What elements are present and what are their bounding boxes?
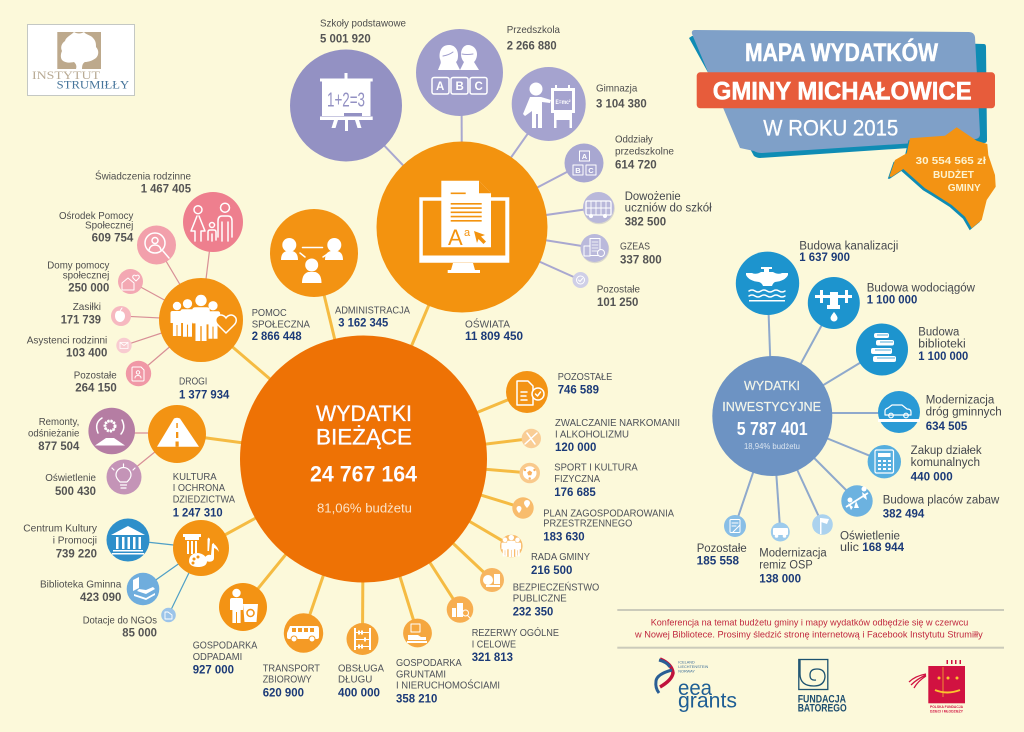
map of the gmina: 30 554 565 zł <box>916 155 986 167</box>
bubble: Drogi <box>148 376 230 463</box>
label: Remonty, odśnieżanie: Remonty, <box>39 416 79 428</box>
icon: map pins <box>516 500 530 513</box>
label: Oświetlenie ulic: Oświetlenie <box>840 530 900 542</box>
label: Remonty, odśnieżanie: 877 504 <box>38 441 80 453</box>
label: GZEAS: 337 800 <box>620 254 662 266</box>
label: Zasiłki <box>61 301 101 326</box>
icon: group of people with heart <box>170 295 236 341</box>
label: Pozostałe: Pozostałe <box>697 543 747 555</box>
bubble: Dowożenie uczniów do szkół <box>583 191 712 229</box>
bubble: Ośrodek Pomocy Społecznej <box>59 210 176 264</box>
bubble: Gospodarka gruntami i nieruchomościami <box>396 619 500 705</box>
main circle: Wydatki inwestycyjne <box>712 356 832 476</box>
main circle: Wydatki bieżące: WYDATKI <box>316 401 412 426</box>
conference notice <box>617 609 1004 649</box>
label: Modernizacja remiz OSP: remiz OSP <box>759 559 813 571</box>
map of the gmina <box>888 127 996 230</box>
label: Budowa wodociągów <box>867 283 976 306</box>
label: Gospodarka gruntami i nieruchomościami <box>396 657 500 705</box>
label: Domy pomocy społecznej: 250 000 <box>68 283 109 295</box>
icon: document and pen <box>730 520 740 532</box>
label: Biblioteka Gminna <box>40 578 121 604</box>
icon: envelope <box>120 342 128 348</box>
label: Rada gminy: RADA GMINY <box>531 551 590 563</box>
label: Sport i kultura fizyczna <box>554 462 638 499</box>
label: Pozostałe <box>74 369 117 395</box>
label: Obsługa długu: 400 000 <box>338 688 380 700</box>
label: Asystenci rodzinni: Asystenci rodzinni <box>27 334 107 346</box>
label: Zwalczanie narkomanii i alkoholizmu: 120 000 <box>555 442 596 454</box>
label: Oddziały przedszkolne: 614 720 <box>615 159 657 171</box>
label: Bezpieczeństwo publiczne: PUBLICZNE <box>513 593 567 605</box>
label: Rezerwy ogólne i celowe: I CELOWE <box>472 638 516 650</box>
icon: football <box>523 466 536 480</box>
bubble: Pozostałe pomoc społeczna <box>74 361 151 395</box>
label: Remonty, odśnieżanie <box>28 416 80 453</box>
label: Asystenci rodzinni: 103 400 <box>66 348 107 360</box>
label: Domy pomocy społecznej: społecznej <box>63 269 109 281</box>
icon: monitor with document <box>419 181 509 273</box>
icon: children and ABC blocks: C <box>474 81 483 93</box>
icon: buildings with magnifier <box>452 603 470 618</box>
bubble: Oświetlenie ulic <box>812 514 905 554</box>
label: Remonty, odśnieżanie: odśnieżanie <box>28 428 79 440</box>
label: Plan zagospodarowania przestrzennego: PRZESTRZENNEGO <box>543 518 632 530</box>
label: Rada gminy <box>531 551 590 577</box>
label: Kultura i ochrona dziedzictwa: 1 247 310 <box>173 508 223 520</box>
label: Plan zagospodarowania przestrzennego: PLAN ZAGOSPODAROWANIA <box>543 508 674 520</box>
logo: Fundacja Batorego: BATOREGO <box>798 703 847 715</box>
icon: stack of books <box>871 333 896 362</box>
logo: Polska Fundacja Dzieci i Młodzieży <box>909 660 965 713</box>
label: Kultura i ochrona dziedzictwa: KULTURA <box>173 471 217 483</box>
label: Modernizacja dróg gminnych: 634 505 <box>926 421 968 433</box>
label: Rezerwy ogólne i celowe: 321 813 <box>472 652 513 664</box>
icon: fire truck <box>773 528 788 538</box>
label: Kultura i ochrona dziedzictwa <box>173 471 235 520</box>
icon: tap above water <box>746 267 788 302</box>
label: Modernizacja remiz OSP <box>759 548 827 586</box>
icon: land and document <box>407 624 427 643</box>
bubble: Bezpieczeństwo publiczne <box>480 568 599 619</box>
label: Bezpieczeństwo publiczne <box>513 581 599 619</box>
icon: people <box>501 535 521 557</box>
label: Zwalczanie narkomanii i alkoholizmu: I ALKOHOLIZMU <box>555 428 629 440</box>
label: Bezpieczeństwo publiczne: 232 350 <box>513 607 553 619</box>
map of the gmina: BUDŻET <box>933 168 975 181</box>
bubble: Biblioteka Gminna <box>40 573 159 605</box>
icon: check badge <box>576 276 584 284</box>
bubble: Transport zbiorowy <box>263 613 323 700</box>
label: Budowa wodociągów: 1 100 000 <box>867 294 917 306</box>
bubble: Rada gminy <box>500 535 590 577</box>
icon: apple <box>115 308 125 322</box>
bubble: Budowa biblioteki <box>856 324 968 376</box>
label: Przedszkola <box>507 24 560 52</box>
bubble: Modernizacja dróg gminnych <box>878 391 1002 433</box>
label: Transport zbiorowy <box>263 662 321 700</box>
logo: EEA Grants: eea <box>678 677 712 700</box>
label: Pozostałe <box>558 371 612 397</box>
label: Zwalczanie narkomanii i alkoholizmu <box>555 417 680 454</box>
label: Ośrodek Pomocy Społecznej <box>59 210 134 245</box>
icon: gear above road <box>95 418 125 446</box>
label: Oświata <box>465 317 523 343</box>
label: Świadczenia rodzinne: 1 467 405 <box>141 184 192 196</box>
icon: shield <box>483 574 500 587</box>
label: Transport zbiorowy: TRANSPORT <box>263 662 321 674</box>
label: Dotacje do NGOs <box>83 614 157 640</box>
bubble: Obsługa długu <box>338 623 384 700</box>
bubble: Pozostałe inwestycyjne <box>697 515 747 567</box>
label: Szkoły podstawowe <box>320 18 406 46</box>
bubble: Sport i kultura fizyczna <box>519 462 638 499</box>
label: Ośrodek Pomocy Społecznej: Społecznej <box>85 219 133 231</box>
bubble: Pozostałe oświata <box>572 272 640 309</box>
label: Pozostałe <box>597 283 640 309</box>
icon: calculator <box>875 450 894 473</box>
title banner: MAPA WYDATKÓW <box>745 37 938 67</box>
bubble: Administracja <box>270 209 410 330</box>
logo: Fundacja Batorego <box>798 660 847 715</box>
bubble: Rezerwy ogólne i celowe <box>447 596 559 664</box>
label: Gospodarka gruntami i nieruchomościami: GOSPODARKA <box>396 657 462 669</box>
label: Zwalczanie narkomanii i alkoholizmu: ZWALCZANIE NARKOMANII <box>555 417 680 429</box>
label: Gimnazja <box>596 83 647 110</box>
bubble: Pomoc społeczna <box>159 278 310 362</box>
label: Świadczenia rodzinne: Świadczenia rodzinne <box>95 169 191 182</box>
label: Oświetlenie: Oświetlenie <box>45 472 96 484</box>
label: Drogi: 1 377 934 <box>179 389 230 401</box>
logo: Instytut Strumiłły: INSTYTUT <box>32 70 100 82</box>
icon: bus <box>287 626 319 642</box>
label: Dowożenie uczniów do szkół: uczniów do szkół <box>625 203 712 215</box>
label: Biblioteka Gminna: 423 090 <box>80 592 121 604</box>
icon: ABC cubes: A <box>582 152 588 161</box>
label: Pozostałe: 746 589 <box>558 385 599 397</box>
label: Gospodarka gruntami i nieruchomościami: I NIERUCHOMOŚCIAMI <box>396 678 500 691</box>
label: Gospodarka gruntami i nieruchomościami: 358 210 <box>396 693 437 705</box>
label: Sport i kultura fizyczna: SPORT I KULTURA <box>554 462 638 474</box>
label: Centrum Kultury i Promocji: Centrum Kultury <box>23 523 98 535</box>
label: Pozostałe: Pozostałe <box>597 283 640 295</box>
label: Oświetlenie ulic: 168 944 <box>862 542 905 554</box>
label: Gospodarka odpadami <box>193 639 257 677</box>
bubble: Świadczenia rodzinne <box>95 169 243 252</box>
label: Kultura i ochrona dziedzictwa: I OCHRONA <box>173 482 225 494</box>
icon: crossed syringe <box>525 433 537 444</box>
label: Pomoc społeczna: POMOC <box>252 307 287 319</box>
conference notice: Konferencja na temat budżetu gminy i mapy wydatków odbędzie się w czerwcu <box>651 617 968 628</box>
label: Modernizacja remiz OSP: Modernizacja <box>759 548 827 560</box>
icon: children and ABC blocks: A <box>436 81 444 93</box>
label: Oddziały przedszkolne: Oddziały <box>615 134 653 146</box>
map of the gmina: GMINY <box>948 182 981 194</box>
label: Dotacje do NGOs: 85 000 <box>122 628 157 640</box>
icon: presentation board: 1+2=3 <box>327 90 365 112</box>
label: Administracja <box>335 304 410 330</box>
label: Kultura i ochrona dziedzictwa: DZIEDZICTWA <box>173 493 235 505</box>
bubble: Oświetlenie <box>45 460 141 498</box>
icon: abacus <box>354 628 371 650</box>
label: Oddziały przedszkolne: przedszkolne <box>615 146 674 158</box>
bubble: Remonty, odśnieżanie <box>28 408 135 454</box>
bubble: Przedszkola <box>416 24 560 116</box>
logo: Polska Fundacja Dzieci i Młodzieży: POLSKA FUNDACJA <box>930 705 963 709</box>
label: Pomoc społeczna: SPOŁECZNA <box>252 318 310 330</box>
icon: light bulb <box>112 464 135 488</box>
icon: museum building <box>111 526 145 554</box>
main circle: Wydatki bieżące: BIEŻĄCE <box>316 424 412 450</box>
label: Gospodarka gruntami i nieruchomościami: GRUNTAMI <box>396 668 446 680</box>
bubble: Zasiłki <box>61 301 131 326</box>
icon: family <box>191 203 232 241</box>
bubble: Budowa placów zabaw <box>841 485 1000 521</box>
label: Transport zbiorowy: ZBIOROWY <box>263 674 312 686</box>
bubble: Domy pomocy społecznej <box>47 259 143 295</box>
label: Budowa placów zabaw: Budowa placów zabaw <box>883 494 1000 506</box>
icon: small document <box>165 612 172 619</box>
label: Budowa placów zabaw <box>883 494 1000 521</box>
label: Centrum Kultury i Promocji <box>23 523 98 560</box>
bubble: Oddziały przedszkolne <box>564 134 674 182</box>
label: Pomoc społeczna: 2 866 448 <box>252 331 302 343</box>
label: Rezerwy ogólne i celowe: REZERWY OGÓLNE <box>472 626 559 639</box>
icon: three people connected <box>281 238 343 283</box>
label: Modernizacja dróg gminnych <box>926 394 1002 433</box>
label: Sport i kultura fizyczna: FIZYCZNA <box>554 473 600 485</box>
label: Gimnazja: Gimnazja <box>596 83 637 95</box>
icon: ABC cubes: B <box>575 166 581 175</box>
bubble: Kultura i ochrona dziedzictwa <box>173 471 235 576</box>
bubble: Zakup działek komunalnych <box>868 445 982 484</box>
icon: ABC cubes <box>573 151 596 175</box>
label: Centrum Kultury i Promocji: 739 220 <box>56 548 97 560</box>
label: Przedszkola: Przedszkola <box>507 24 560 36</box>
bubble: Dotacje do NGOs <box>83 608 176 640</box>
bubble: Budowa kanalizacji <box>736 240 898 315</box>
icon: street lamp <box>820 518 829 534</box>
icon: open books <box>133 577 155 600</box>
label: Zakup działek komunalnych: 440 000 <box>911 472 953 484</box>
label: Gimnazja: 3 104 380 <box>596 98 647 110</box>
label: Budowa placów zabaw: 382 494 <box>883 509 925 521</box>
main circle: Wydatki bieżące: 24 767 164 <box>310 462 418 487</box>
icon: road <box>157 418 199 447</box>
label: Domy pomocy społecznej <box>47 259 110 295</box>
label: Rezerwy ogólne i celowe <box>472 626 559 664</box>
label: Ośrodek Pomocy Społecznej: Ośrodek Pomocy <box>59 210 134 222</box>
label: Pozostałe: Pozostałe <box>74 369 117 381</box>
label: Administracja: ADMINISTRACJA <box>335 304 410 316</box>
label: Modernizacja dróg gminnych: Modernizacja <box>926 394 995 406</box>
icon: playground seesaw <box>846 486 868 510</box>
bubble: Centrum Kultury i Promocji <box>23 518 149 562</box>
label: Gospodarka odpadami: ODPADAMI <box>193 651 242 663</box>
label: Budowa kanalizacji: Budowa kanalizacji <box>799 240 898 252</box>
label: Zasiłki: Zasiłki <box>73 301 101 313</box>
label: Pozostałe: 101 250 <box>597 297 638 309</box>
label: Zakup działek komunalnych: Zakup działek <box>911 445 982 457</box>
bubble: Modernizacja remiz OSP <box>759 522 827 586</box>
main circle: Wydatki inwestycyjne: WYDATKI <box>744 378 800 393</box>
label: Szkoły podstawowe: 5 001 920 <box>320 34 371 46</box>
label: Oddziały przedszkolne <box>615 134 674 171</box>
label: Modernizacja remiz OSP: 138 000 <box>759 574 801 586</box>
label: Budowa biblioteki: biblioteki <box>918 339 966 351</box>
icon: document with check <box>517 381 544 405</box>
label: Administracja: 3 162 345 <box>338 318 389 330</box>
icon: car on road <box>878 405 920 422</box>
label: Dowożenie uczniów do szkół <box>625 191 712 229</box>
label: Domy pomocy społecznej: Domy pomocy <box>47 259 110 271</box>
logo: Instytut Strumiłły <box>28 24 134 96</box>
label: Drogi: DROGI <box>179 376 207 388</box>
icon: ABC cubes: C <box>588 166 594 175</box>
label: Bezpieczeństwo publiczne: BEZPIECZEŃSTWO <box>513 581 599 594</box>
label: Budowa biblioteki: Budowa <box>918 327 960 339</box>
label: Ośrodek Pomocy Społecznej: 609 754 <box>92 233 134 245</box>
bubble: GZEAS <box>580 234 662 266</box>
logo: EEA Grants: ICELAND <box>678 660 695 664</box>
bubble: Gospodarka odpadami <box>193 583 267 677</box>
label: Zakup działek komunalnych: komunalnych <box>911 457 980 469</box>
logo: Fundacja Batorego: FUNDACJA <box>798 694 846 706</box>
icon: school bus <box>586 201 611 218</box>
main circle: Wydatki inwestycyjne: 18,94% budżetu <box>744 441 800 451</box>
label: Drogi <box>179 376 230 401</box>
label: Budowa biblioteki: 1 100 000 <box>918 351 968 363</box>
conference notice: w Nowej Bibliotece. Prosimy śledzić stronę internetową i Facebook Instytutu Strumiłły <box>634 630 983 641</box>
bubble: Budowa wodociągów <box>808 277 976 329</box>
icon: presentation board <box>320 73 373 131</box>
label: Budowa wodociągów: Budowa wodociągów <box>867 283 976 295</box>
main circle: Wydatki bieżące: 81,06% budżetu <box>317 501 412 516</box>
logo: Instytut Strumiłły: STRUMIŁŁY <box>57 80 130 92</box>
main circle: Wydatki inwestycyjne: 5 787 401 <box>737 419 808 439</box>
label: Oświetlenie ulic <box>840 530 905 554</box>
bubble: Zwalczanie narkomanii i alkoholizmu <box>522 417 680 454</box>
label: Oświata: 11 809 450 <box>465 331 523 343</box>
logo: EEA Grants <box>656 659 737 712</box>
label: Biblioteka Gminna: Biblioteka Gminna <box>40 578 121 590</box>
label: Przedszkola: 2 266 880 <box>507 40 557 52</box>
icon: children and ABC blocks: B <box>456 81 464 93</box>
label: Dotacje do NGOs: Dotacje do NGOs <box>83 614 157 626</box>
logo: Polska Fundacja Dzieci i Młodzieży: DZIECI I MŁODZIEŻY <box>930 709 964 713</box>
label: Zasiłki: 171 739 <box>61 314 101 326</box>
label: Modernizacja dróg gminnych: dróg gminnych <box>926 406 1002 418</box>
label: Centrum Kultury i Promocji: i Promocji <box>53 535 97 547</box>
label: Pozostałe: POZOSTAŁE <box>558 371 612 383</box>
main circle: Wydatki bieżące <box>240 336 487 582</box>
bubble: Asystenci rodzinni <box>27 334 132 360</box>
label: Rada gminy: 216 500 <box>531 565 572 577</box>
label: Gospodarka odpadami: 927 000 <box>193 665 234 677</box>
label: Zakup działek komunalnych <box>911 445 982 484</box>
label: Obsługa długu <box>338 663 384 700</box>
label: Pomoc społeczna <box>252 307 310 343</box>
icon: monitor with document: a <box>464 227 471 239</box>
icon: monitor with document: A <box>448 225 463 250</box>
icon: document with person <box>132 367 144 381</box>
label: Transport zbiorowy: 620 900 <box>263 688 304 700</box>
label: Pozostałe <box>697 543 747 567</box>
title banner: GMINY MICHAŁOWICE <box>713 77 972 105</box>
logo: EEA Grants: LIECHTENSTEIN <box>678 665 709 669</box>
label: Dowożenie uczniów do szkół: 382 500 <box>625 217 666 229</box>
title banner: W ROKU 2015 <box>763 116 898 141</box>
bubble: Szkoły podstawowe <box>290 18 406 162</box>
logo: EEA Grants: NORWAY <box>678 669 695 673</box>
icon: person with recycling bin <box>230 589 258 623</box>
icon: house with heart <box>122 275 139 290</box>
label: Obsługa długu: OBSŁUGA <box>338 663 384 675</box>
icon: teacher at blackboard: E=mc² <box>556 99 571 106</box>
label: Oświetlenie ulic: ulic <box>840 542 859 554</box>
label: Dowożenie uczniów do szkół: Dowożenie <box>625 191 681 203</box>
connector lines <box>112 72 899 639</box>
label: Obsługa długu: DŁUGU <box>338 674 372 686</box>
label: Plan zagospodarowania przestrzennego <box>543 508 674 544</box>
label: Oświetlenie: 500 430 <box>55 486 96 498</box>
label: Plan zagospodarowania przestrzennego: 183 630 <box>543 532 585 544</box>
label: Budowa kanalizacji: 1 637 900 <box>799 252 850 264</box>
logo: EEA Grants: grants <box>678 690 737 712</box>
label: GZEAS <box>620 240 662 266</box>
label: Oświetlenie <box>45 472 96 498</box>
label: Sport i kultura fizyczna: 176 685 <box>554 487 596 499</box>
bubble: Oświata <box>376 142 548 343</box>
label: Pozostałe: 185 558 <box>697 555 740 567</box>
icon: column, palette, note <box>183 534 219 567</box>
label: Świadczenia rodzinne <box>95 169 192 196</box>
main circle: Wydatki inwestycyjne: INWESTYCYJNE <box>722 399 821 414</box>
label: Asystenci rodzinni <box>27 334 107 360</box>
label: GZEAS: GZEAS <box>620 240 650 252</box>
bubble: Plan zagospodarowania przestrzennego <box>512 497 674 544</box>
label: Budowa biblioteki <box>918 327 968 363</box>
label: Pozostałe: 264 150 <box>75 383 117 395</box>
bubble: Gimnazja <box>512 67 647 141</box>
icon: office buildings <box>584 238 604 256</box>
title banner <box>689 30 996 230</box>
label: Gospodarka odpadami: GOSPODARKA <box>193 639 257 651</box>
bubble: Pozostałe bieżące <box>506 371 612 413</box>
label: Budowa kanalizacji <box>799 240 898 264</box>
label: Oświata: OŚWIATA <box>465 317 510 330</box>
label: Szkoły podstawowe: Szkoły podstawowe <box>320 18 406 30</box>
icon: person in magnifier <box>145 233 169 258</box>
icon: pipe with water drop <box>815 290 852 322</box>
icon: children and ABC blocks <box>432 45 487 94</box>
